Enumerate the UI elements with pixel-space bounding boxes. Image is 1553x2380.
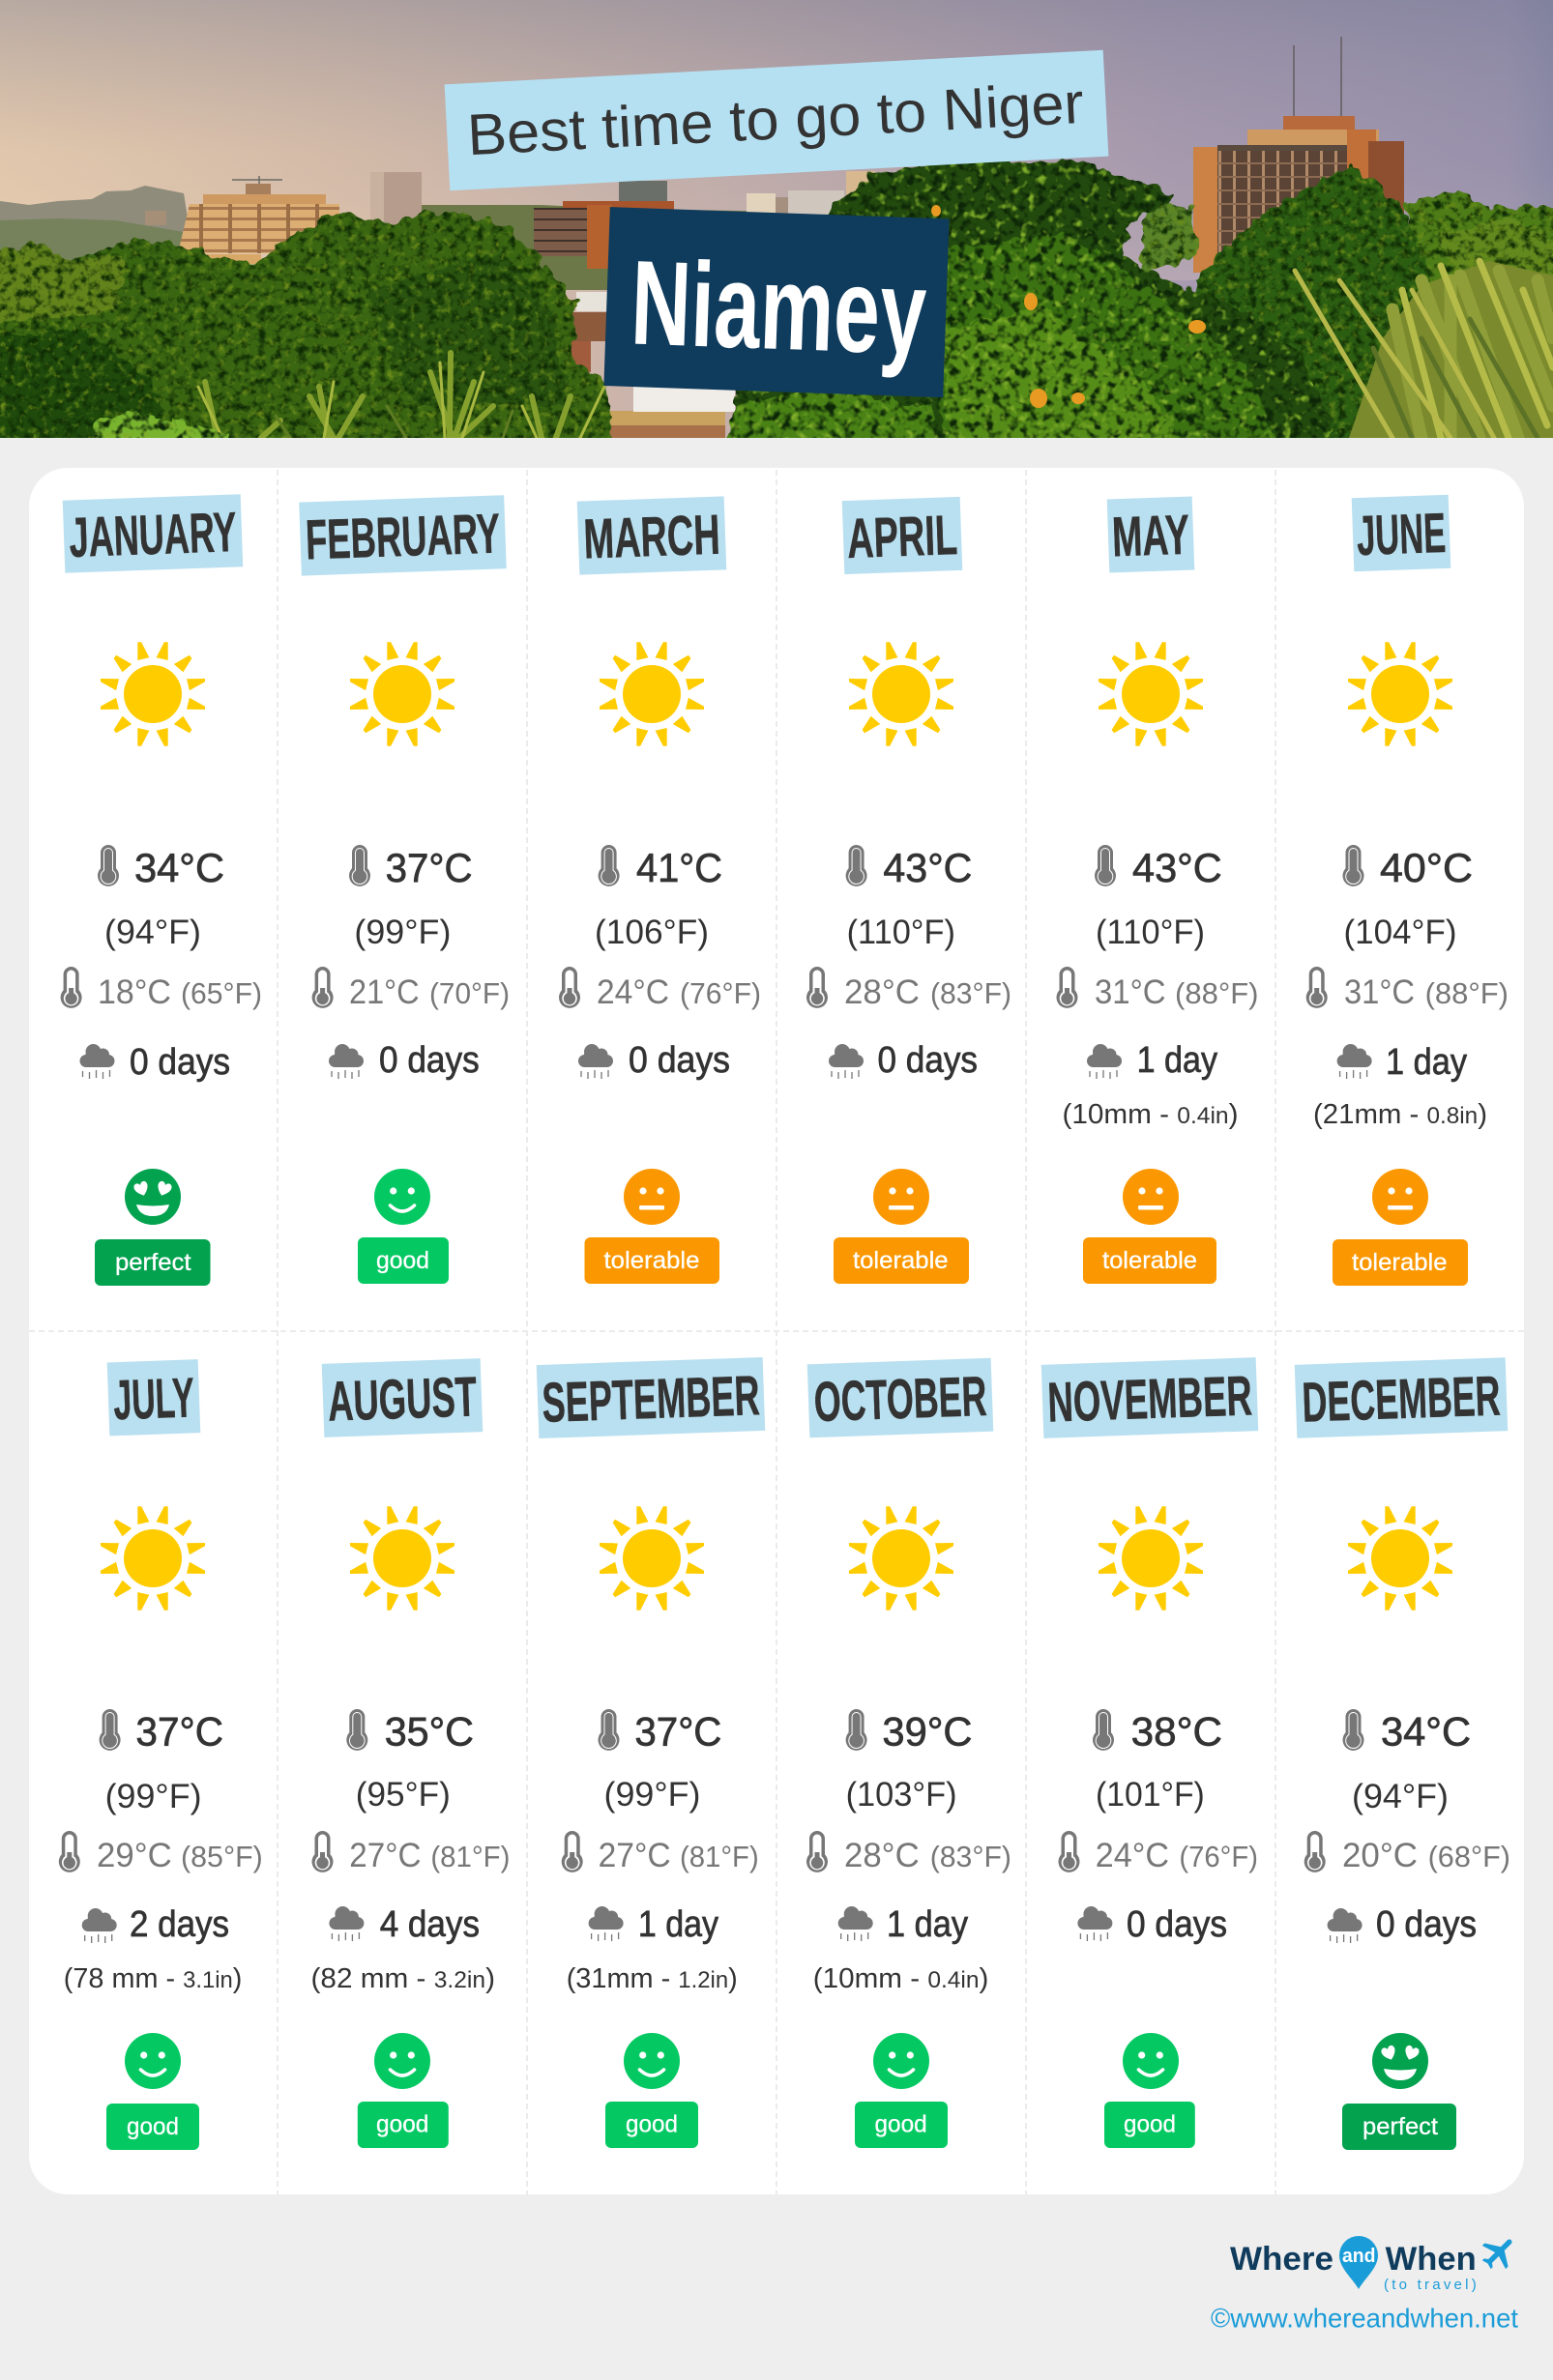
heading: Niamey [603,207,950,397]
low temperature [806,967,1011,1011]
high temperature in Fahrenheit: (101°F) [1096,1776,1205,1814]
high temperature in Fahrenheit: (95°F) [356,1776,451,1814]
left tree canopy [0,209,612,438]
icon: map pin with and: and [1342,2246,1375,2267]
rain days [329,1904,480,1945]
month: April: APRIL [846,504,958,570]
low temperature: 20°C [1342,1837,1418,1874]
smiley: tolerable [1372,1169,1428,1225]
badge: tolerable: tolerable [603,1247,700,1274]
month: July: JULY [112,1366,195,1432]
month: August [322,1358,483,1437]
low temperature: 28°C [844,1837,920,1874]
panel: January [61,494,262,1286]
high temperature in Fahrenheit: (94°F) [1352,1778,1449,1815]
palm fronds [1295,261,1553,438]
bright leafy tree [727,159,1334,438]
rain days: 0 days [1127,1904,1227,1945]
rain days: 4 days [380,1904,480,1945]
low temperature [311,1831,510,1874]
high temperature: 37°C [135,1709,223,1754]
high temperature [1095,845,1222,890]
badge: tolerable [834,1237,969,1284]
icon: sun [1099,1506,1203,1611]
high temperature [1342,845,1473,890]
high temperature: 39°C [882,1709,973,1754]
low temperature: 21°C [349,973,420,1011]
icon: sun [101,642,205,746]
rain days [1337,1042,1467,1083]
badge: good: good [1124,2111,1176,2138]
right tower [1193,37,1404,273]
panel: November [1041,1357,1258,2148]
smiley: tolerable [873,1169,929,1225]
low temperature: (68°F) [1428,1840,1510,1873]
rain days [1077,1904,1227,1945]
low temperature [1056,967,1259,1011]
panel: August [311,1358,510,2148]
orange fruit on the tree [931,205,1206,408]
low temperature: (76°F) [680,976,761,1010]
month: June: JUNE [1356,502,1447,567]
logo: Where and When [1230,2228,1523,2293]
rain days [589,1904,718,1945]
icon: sun [600,642,704,746]
badge: perfect: perfect [1363,2113,1438,2140]
high temperature in Fahrenheit: (99°F) [354,914,451,951]
badge: good: good [127,2113,179,2140]
month: October [807,1358,993,1437]
low temperature [1058,1831,1258,1874]
low temperature: 29°C [97,1837,172,1874]
month: November: NOVEMBER [1046,1364,1253,1435]
distant hills and city [0,186,747,290]
website credit: ©www.whereandwhen.net [1211,2304,1518,2334]
low temperature: 24°C [597,973,669,1011]
icon: sun [849,1506,953,1611]
high temperature: 43°C [883,845,972,890]
high temperature: 34°C [1381,1709,1471,1754]
badge: good: good [626,2111,678,2138]
high temperature: 43°C [1132,845,1222,890]
rain days: 1 day [1386,1042,1467,1083]
icon: sun [1348,1506,1452,1611]
rain days [838,1904,968,1945]
badge: tolerable [1333,1239,1468,1286]
logo tagline: (to travel) [1384,2277,1477,2293]
smiley: good [125,2033,181,2089]
low temperature: (83°F) [930,976,1011,1010]
month: June [1352,495,1450,571]
high temperature in Fahrenheit: (94°F) [104,914,201,951]
icon: sun [1348,642,1452,746]
low temperature: (65°F) [181,976,262,1010]
panel: July [59,1359,263,2150]
panel: April [806,497,1011,1284]
heading: Niamey: Niamey [629,237,928,380]
smiley: good [374,2033,430,2089]
rain days: 0 days [629,1040,730,1081]
foreground grass [198,353,604,438]
high temperature in Fahrenheit: (104°F) [1344,914,1456,951]
high temperature in Fahrenheit: (110°F) [1096,914,1205,951]
rain days: 1 day [1137,1040,1217,1081]
low temperature: (88°F) [1425,976,1509,1010]
month: May: MAY [1111,504,1190,568]
high temperature: 41°C [636,845,722,890]
rain days: 1 day [887,1904,968,1945]
high temperature in Fahrenheit: (99°F) [603,1776,700,1814]
bright shrub [93,411,229,438]
icon: airplane [1475,2228,1523,2277]
icon: sun [600,1506,704,1611]
rainfall amount: (10mm - 0.4in) [1062,1099,1238,1130]
low temperature: (81°F) [680,1840,759,1873]
icon: sun [1099,642,1203,746]
month: April [842,497,962,574]
high temperature: 35°C [385,1709,474,1754]
high temperature [599,845,722,890]
month: September [537,1357,765,1438]
low temperature: 28°C [844,973,920,1011]
low temperature: (83°F) [930,1840,1011,1873]
high temperature in Fahrenheit: (106°F) [595,914,709,951]
rain days [829,1040,978,1081]
smiley: good [1123,2033,1179,2089]
month: February: FEBRUARY [305,502,501,571]
panel: December [1295,1357,1510,2150]
smiley: perfect [1372,2033,1428,2089]
rain days [329,1040,480,1081]
badge: perfect [1342,2104,1456,2150]
low temperature: (85°F) [181,1840,263,1873]
badge: tolerable: tolerable [1102,1247,1197,1274]
badge: good [1104,2102,1195,2148]
smiley: good [374,1169,430,1225]
month: March: MARCH [582,504,721,570]
smiley: tolerable [624,1169,680,1225]
icon: sun [350,1506,454,1611]
badge: tolerable [584,1237,719,1284]
rainfall amount: (10mm - 0.4in) [813,1963,988,1994]
panel: March [559,496,761,1284]
high temperature in Fahrenheit: (110°F) [847,914,955,951]
icon: sun [101,1506,205,1611]
badge: good [358,1237,449,1284]
month: August: AUGUST [327,1365,478,1434]
low temperature [312,967,510,1011]
heading: Best time to go to Niger: Best time to go to Niger [466,71,1085,167]
low temperature [559,967,761,1011]
rain days [79,1042,230,1083]
low temperature [1304,1831,1510,1874]
sky [0,0,1553,438]
high temperature [100,1709,223,1754]
low temperature: (76°F) [1179,1840,1258,1873]
high temperature in Fahrenheit: (99°F) [105,1778,202,1815]
low temperature [1306,967,1509,1011]
rain days [1087,1040,1217,1081]
low temperature: 24°C [1096,1837,1169,1874]
icon: sun [350,642,454,746]
low temperature [806,1831,1011,1874]
low temperature: 31°C [1095,973,1166,1011]
high temperature [598,1709,721,1754]
high temperature [1342,1709,1471,1754]
high temperature: 37°C [386,845,473,890]
central city buildings [534,171,875,439]
rain days [578,1040,730,1081]
panel: October [806,1358,1011,2148]
month: May [1107,496,1194,573]
low temperature [562,1831,759,1874]
smiley: good [873,2033,929,2089]
heading: Best time to go to Niger [445,50,1108,190]
rainfall amount: (31mm - 1.2in) [567,1963,738,1994]
low temperature: 31°C [1344,973,1415,1011]
badge: perfect [95,1239,211,1286]
high temperature: 38°C [1131,1709,1222,1754]
badge: tolerable: tolerable [853,1247,949,1274]
rain days: 0 days [878,1040,978,1081]
smiley: good [624,2033,680,2089]
rain days: 1 day [638,1904,718,1945]
rainfall amount: (82 mm - 3.2in) [311,1963,495,1994]
panel: June [1306,495,1509,1286]
high temperature: 34°C [134,845,224,890]
month: January [63,494,243,573]
panel: September [537,1357,765,2148]
rain days [1328,1904,1477,1945]
month: March [577,496,726,575]
panel: May [1056,496,1259,1284]
high temperature: 40°C [1380,845,1473,890]
right dark trees [1139,163,1553,438]
icon: map pin with and [1339,2236,1378,2289]
month: October: OCTOBER [813,1365,987,1434]
rainfall amount: (21mm - 0.8in) [1313,1099,1487,1130]
left office building [155,172,422,264]
low temperature: 27°C [349,1837,422,1874]
high temperature [346,1709,474,1754]
low temperature: 27°C [599,1837,671,1874]
rain days: 0 days [379,1040,480,1081]
high temperature in Fahrenheit: (103°F) [846,1776,957,1814]
smiley: tolerable [1123,1169,1179,1225]
badge: perfect: perfect [115,1249,191,1276]
badge: tolerable [1083,1237,1216,1284]
low temperature: 18°C [98,973,171,1011]
month: February [299,495,507,576]
header photo: Niamey skyline [0,0,1553,438]
badge: good [605,2102,698,2148]
badge: good [106,2104,199,2150]
badge: good [358,2102,449,2148]
month: September: SEPTEMBER [541,1364,761,1435]
low temperature [61,967,262,1011]
logo wordmark: When: When [1386,2241,1477,2278]
rain days: 0 days [1376,1904,1477,1945]
rain days: 2 days [130,1904,229,1945]
high temperature [846,845,972,890]
high temperature: 37°C [634,1709,721,1754]
logo wordmark: Where: Where [1230,2241,1333,2278]
rainfall amount: (78 mm - 3.1in) [64,1963,242,1994]
badge: good: good [874,2111,927,2138]
badge: good: good [376,2111,428,2138]
white calendar card [29,468,1524,2194]
month: January: JANUARY [68,501,238,569]
badge: tolerable: tolerable [1352,1249,1447,1276]
low temperature: (81°F) [430,1840,510,1873]
rain days: 0 days [130,1042,230,1083]
high temperature [349,845,473,890]
month: July [107,1359,200,1436]
icon: sun [849,642,953,746]
badge: good [855,2102,948,2148]
panel: February [299,495,510,1284]
month: November [1041,1357,1258,1438]
low temperature [59,1831,263,1874]
low temperature: (70°F) [429,976,510,1010]
rain days [82,1904,229,1945]
badge: good: good [376,1247,429,1274]
smiley: perfect [125,1169,181,1225]
low temperature: (88°F) [1175,976,1259,1010]
